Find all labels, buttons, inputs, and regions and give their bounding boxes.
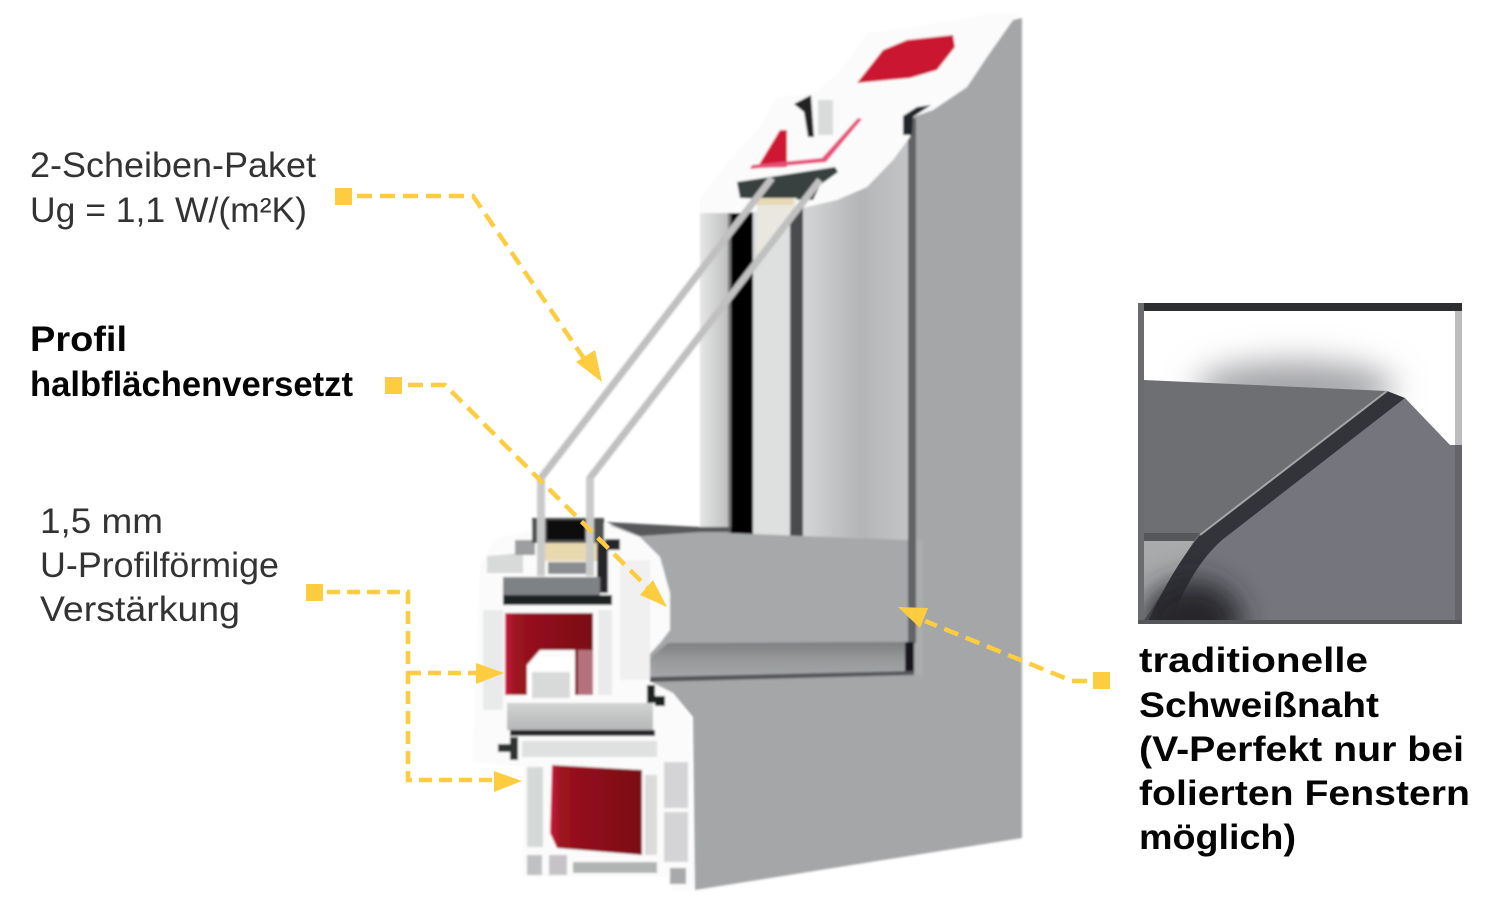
lower red reinforcement: [550, 765, 642, 855]
callout leader: Schweißnaht: [898, 607, 1110, 689]
label: traditionelle Schweißnaht: folierten Fenstern: [1139, 774, 1470, 813]
callout leader: U-Profil: [306, 584, 522, 792]
sash bottom ledge: [648, 642, 906, 677]
window profile cross-section photo: [473, 13, 1022, 890]
label: traditionelle Schweißnaht: möglich): [1139, 818, 1296, 857]
callout leader: Profil: [385, 377, 667, 607]
callout leader: Ug glass: [335, 188, 602, 382]
label: U-Profil Verstärkung: U-Profilförmige: [40, 546, 279, 585]
label: traditionelle Schweißnaht: traditionelle: [1139, 641, 1368, 680]
label: 2-Scheiben-Paket: Ug = 1,1 W/(m²K): [30, 191, 307, 230]
weld seam detail photo: [1138, 303, 1462, 624]
top section: white profile cut: [700, 13, 1022, 262]
label: U-Profil Verstärkung: Verstärkung: [40, 590, 240, 629]
inner reveal surfaces: [700, 125, 908, 545]
bottom section: white profile cut: [473, 478, 694, 890]
upper red reinforcement: [505, 613, 593, 695]
sash front surface: [630, 532, 908, 645]
sash bottom rail: [507, 703, 653, 730]
glazing spacer: [532, 518, 604, 543]
label: U-Profil Verstärkung: 1,5 mm: [40, 502, 163, 541]
label: traditionelle Schweißnaht: Schweißnaht: [1139, 686, 1379, 725]
frame front face: [600, 18, 1022, 890]
dark gasket lines: [606, 118, 923, 682]
label: 2-Scheiben-Paket: 2-Scheiben-Paket: [30, 146, 316, 185]
glass panes: [541, 178, 820, 575]
label: Profil halbflächenversetzt: halbflächenversetzt: [30, 365, 353, 404]
label: traditionelle Schweißnaht: (V-Perfekt nur bei: [1139, 730, 1464, 769]
label: Profil halbflächenversetzt: Profil: [30, 320, 127, 359]
